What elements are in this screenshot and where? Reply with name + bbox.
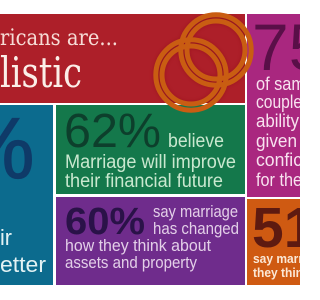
panel: green statistic <box>56 105 245 194</box>
purple text: say marriage <box>153 203 238 221</box>
panel: magenta statistic <box>247 10 320 197</box>
heading: optimistic: listic <box>0 48 82 97</box>
heading: americans are: ricans are... <box>0 26 118 51</box>
panel: red headline <box>0 14 245 103</box>
panel: green statistic: their financial future <box>65 171 223 192</box>
panel: blue statistic <box>0 101 53 285</box>
panel: green statistic: Marriage will improve <box>65 152 236 173</box>
panel: orange statistic <box>247 196 315 285</box>
62 percent: 62% <box>64 105 161 158</box>
panel: purple statistic: has changed <box>153 220 239 238</box>
green text: believe <box>168 131 224 152</box>
panel: purple statistic <box>56 197 245 285</box>
panel: purple statistic: assets and property <box>65 254 198 272</box>
icon: wedding rings <box>156 15 251 110</box>
60 percent: 60% <box>65 201 145 243</box>
panel: blue statistic: etter <box>0 252 46 277</box>
blue text: ir <box>0 225 12 250</box>
panel: magenta statistic: given <box>256 130 297 151</box>
panel: purple statistic: how they think about <box>65 237 211 255</box>
